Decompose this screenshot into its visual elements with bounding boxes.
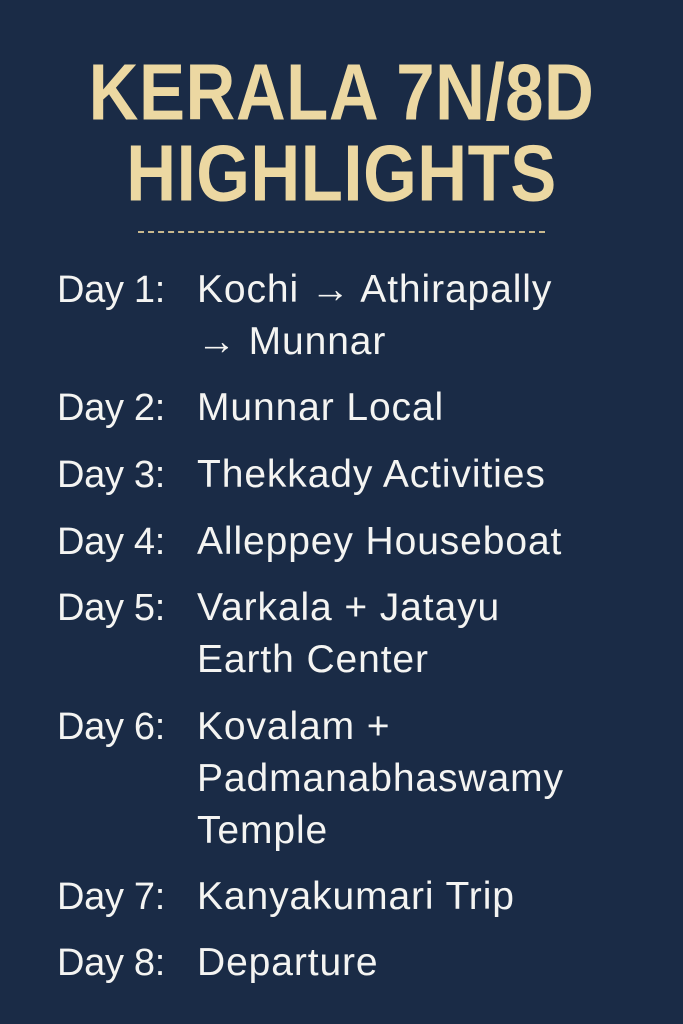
itinerary list: Day 7: xyxy=(57,876,165,918)
dashed divider xyxy=(138,231,545,233)
itinerary list: Day 3: xyxy=(57,454,165,496)
itinerary list: Munnar Local xyxy=(197,386,444,429)
day 5 xyxy=(57,586,500,681)
itinerary list: Day 5: xyxy=(57,587,165,629)
itinerary list: Earth Center xyxy=(197,638,429,681)
itinerary list: Kovalam + xyxy=(197,705,390,748)
itinerary list: → Munnar xyxy=(197,320,386,363)
itinerary list: Thekkady Activities xyxy=(197,453,546,496)
day 3 xyxy=(57,453,546,496)
title: KERALA 7N/8D xyxy=(89,48,594,137)
itinerary list: Day 4: xyxy=(57,521,165,563)
itinerary list: Varkala + Jatayu xyxy=(197,586,500,629)
itinerary list: Kanyakumari Trip xyxy=(197,875,515,918)
title xyxy=(89,48,594,218)
day 7 xyxy=(57,875,515,918)
itinerary list: Padmanabhaswamy xyxy=(197,757,564,800)
itinerary list: Kochi → Athirapally xyxy=(197,268,552,311)
day 1 xyxy=(57,268,552,363)
itinerary list: Day 2: xyxy=(57,387,165,429)
day 6 xyxy=(57,705,564,852)
itinerary list: Temple xyxy=(197,809,328,852)
itinerary list: Day 8: xyxy=(57,942,165,984)
title: HIGHLIGHTS xyxy=(126,129,557,218)
day 4 xyxy=(57,520,562,563)
day 2 xyxy=(57,386,444,429)
itinerary list: Alleppey Houseboat xyxy=(197,520,562,563)
day 8 xyxy=(57,941,379,984)
itinerary list: Day 6: xyxy=(57,706,165,748)
itinerary list xyxy=(57,268,564,984)
itinerary list: Departure xyxy=(197,941,379,984)
itinerary list: Day 1: xyxy=(57,269,165,311)
